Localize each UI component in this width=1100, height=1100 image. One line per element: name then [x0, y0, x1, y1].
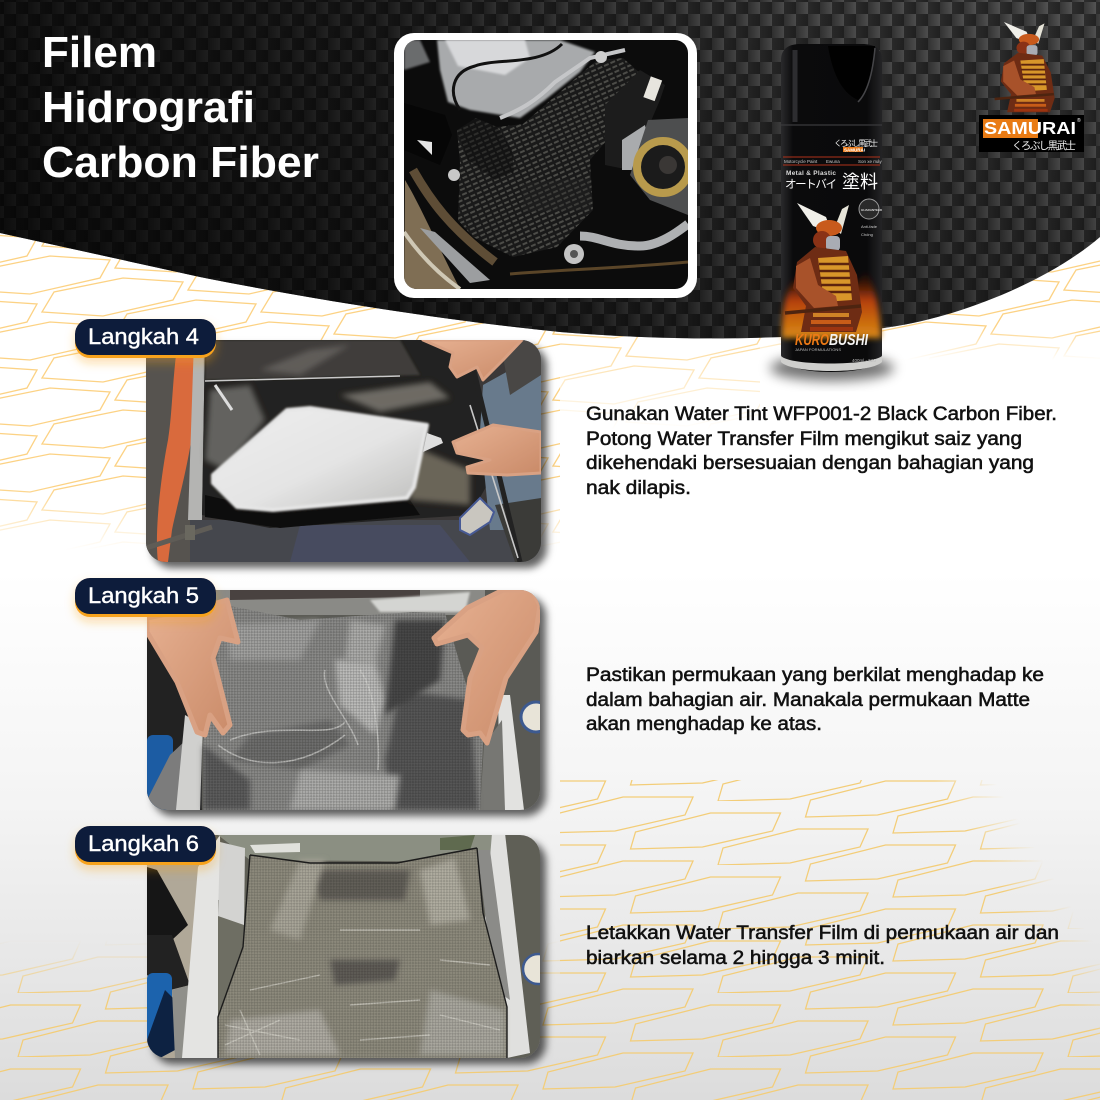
title: Hidrografi: [42, 83, 255, 132]
can shadow: [770, 355, 894, 381]
orange strip: [157, 355, 195, 562]
spray can: Anti-fade: [861, 224, 878, 229]
black film: [202, 340, 490, 528]
background hexagon line pattern: bottom: [0, 780, 1100, 1100]
photo: step 4 film cut over white tank: [146, 340, 541, 562]
step 6 description: [586, 922, 1059, 969]
lever: [580, 224, 688, 246]
step 6 description: biarkan selama 2 hingga 3 minit.: [586, 947, 885, 969]
round sticker: [520, 700, 540, 734]
spray can: Ewuna: [826, 159, 840, 164]
dark items left: [147, 637, 202, 810]
step 4 description: Potong Water Transfer Film mengikut saiz yang: [586, 428, 1022, 450]
foot: [460, 498, 494, 535]
background hexagon line pattern: top: [0, 230, 1100, 560]
sensor and silver parts: [605, 70, 665, 170]
photo: step 6 film floating on water: [147, 833, 553, 1058]
step 5 badge: Langkah 5: [88, 583, 199, 608]
step 6 badge: Langkah 6: [88, 831, 199, 856]
step 4 description: dikehendaki bersesuaian dengan bahagian yang: [586, 452, 1034, 474]
spray can: Metal & Plastic: [786, 170, 836, 177]
photo: carbon fibre engine cover in white frame: [394, 33, 697, 298]
Samurai brand logo: [979, 22, 1084, 152]
left hand: [147, 600, 238, 735]
step 4 description: [586, 403, 1057, 499]
bench left: [147, 865, 200, 1058]
carbon fibre header wave: [0, 0, 1100, 338]
exhaust pipes: [404, 180, 460, 289]
hand top: [423, 340, 522, 380]
blue box: [147, 973, 172, 1043]
spray can: JAPAN FORMULATIONS: [795, 347, 841, 352]
step 5 description: dalam bahagian air. Manakala permukaan Matte: [586, 689, 1030, 711]
carbon cover: [457, 58, 640, 257]
spray can: [770, 44, 894, 381]
step 6 badge: [75, 826, 216, 865]
glossy nozzle cap: [828, 46, 875, 100]
guarantee badge: [859, 199, 879, 219]
step 4 badge: [75, 319, 216, 358]
rod: [473, 367, 520, 562]
right white rail: [485, 833, 530, 1058]
step 5 badge: [75, 578, 216, 617]
foil corner: [218, 842, 245, 925]
chain and sprocket: [630, 118, 688, 215]
grey basin: [218, 900, 246, 1015]
title: [42, 28, 319, 187]
Samurai brand logo: ®: [1077, 117, 1081, 124]
KUROBUSHI wordmark: [795, 332, 869, 349]
step 4 badge: Langkah 4: [88, 324, 199, 349]
jeans and background right: [480, 340, 541, 530]
spray can: 塗料: [842, 172, 878, 192]
step 5 description: [586, 664, 1044, 735]
grey cloth left: [146, 358, 190, 562]
round sticker: [523, 954, 553, 984]
engine casing: [437, 40, 595, 118]
silver edge: [500, 50, 625, 118]
step 5 description: akan menghadap ke atas.: [586, 713, 822, 735]
black bottles: [147, 867, 188, 940]
spray can: 400ml ◦ 520: [852, 358, 876, 363]
photo: step 5 film with hands: [147, 590, 551, 810]
carbon film: [218, 848, 507, 1058]
spray can: Chống: [861, 232, 873, 237]
step 4 description: nak dilapis.: [586, 477, 691, 499]
logo samurai figure: [995, 22, 1055, 112]
left white rail: [182, 835, 222, 1058]
can base rim: [781, 356, 882, 371]
title: Carbon Fiber: [42, 138, 319, 187]
spray can: Motorcycle Paint: [784, 159, 818, 164]
KUROBUSHI wordmark: BUSHI: [829, 332, 869, 349]
ground: [190, 520, 540, 562]
white rails: [176, 715, 203, 810]
top foil strip: [215, 590, 485, 615]
step 4 description: Gunakan Water Tint WFP001-2 Black Carbon Fiber.: [586, 403, 1057, 425]
silver tape edge: [188, 358, 204, 520]
step 6 description: Letakkan Water Transfer Film di permukaan air dan: [586, 922, 1059, 944]
black bracket: [432, 119, 444, 131]
Samurai brand logo: SAMURAI: [984, 118, 1076, 138]
white tank: [213, 408, 427, 510]
samurai on can: [785, 203, 862, 332]
hand lower: [453, 425, 541, 475]
spray can: オートバイ: [785, 178, 837, 191]
KUROBUSHI wordmark: KURO: [795, 332, 829, 349]
flames: [782, 270, 881, 338]
title: Filem: [42, 28, 157, 77]
spray can: Son xe máy: [858, 159, 883, 164]
spray can: GUARANTEED: [861, 208, 883, 212]
right hand: [434, 590, 540, 743]
carbon film: [203, 605, 483, 810]
can label text: くろぶし黒武士: [834, 138, 878, 148]
top water: [218, 835, 495, 862]
step 5 description: Pastikan permukaan yang berkilat menghadap ke: [586, 664, 1044, 686]
spray can: SAMURAI: [844, 148, 865, 152]
Samurai brand logo: くろぶし黒武士: [1012, 139, 1076, 152]
strap: [146, 527, 212, 548]
